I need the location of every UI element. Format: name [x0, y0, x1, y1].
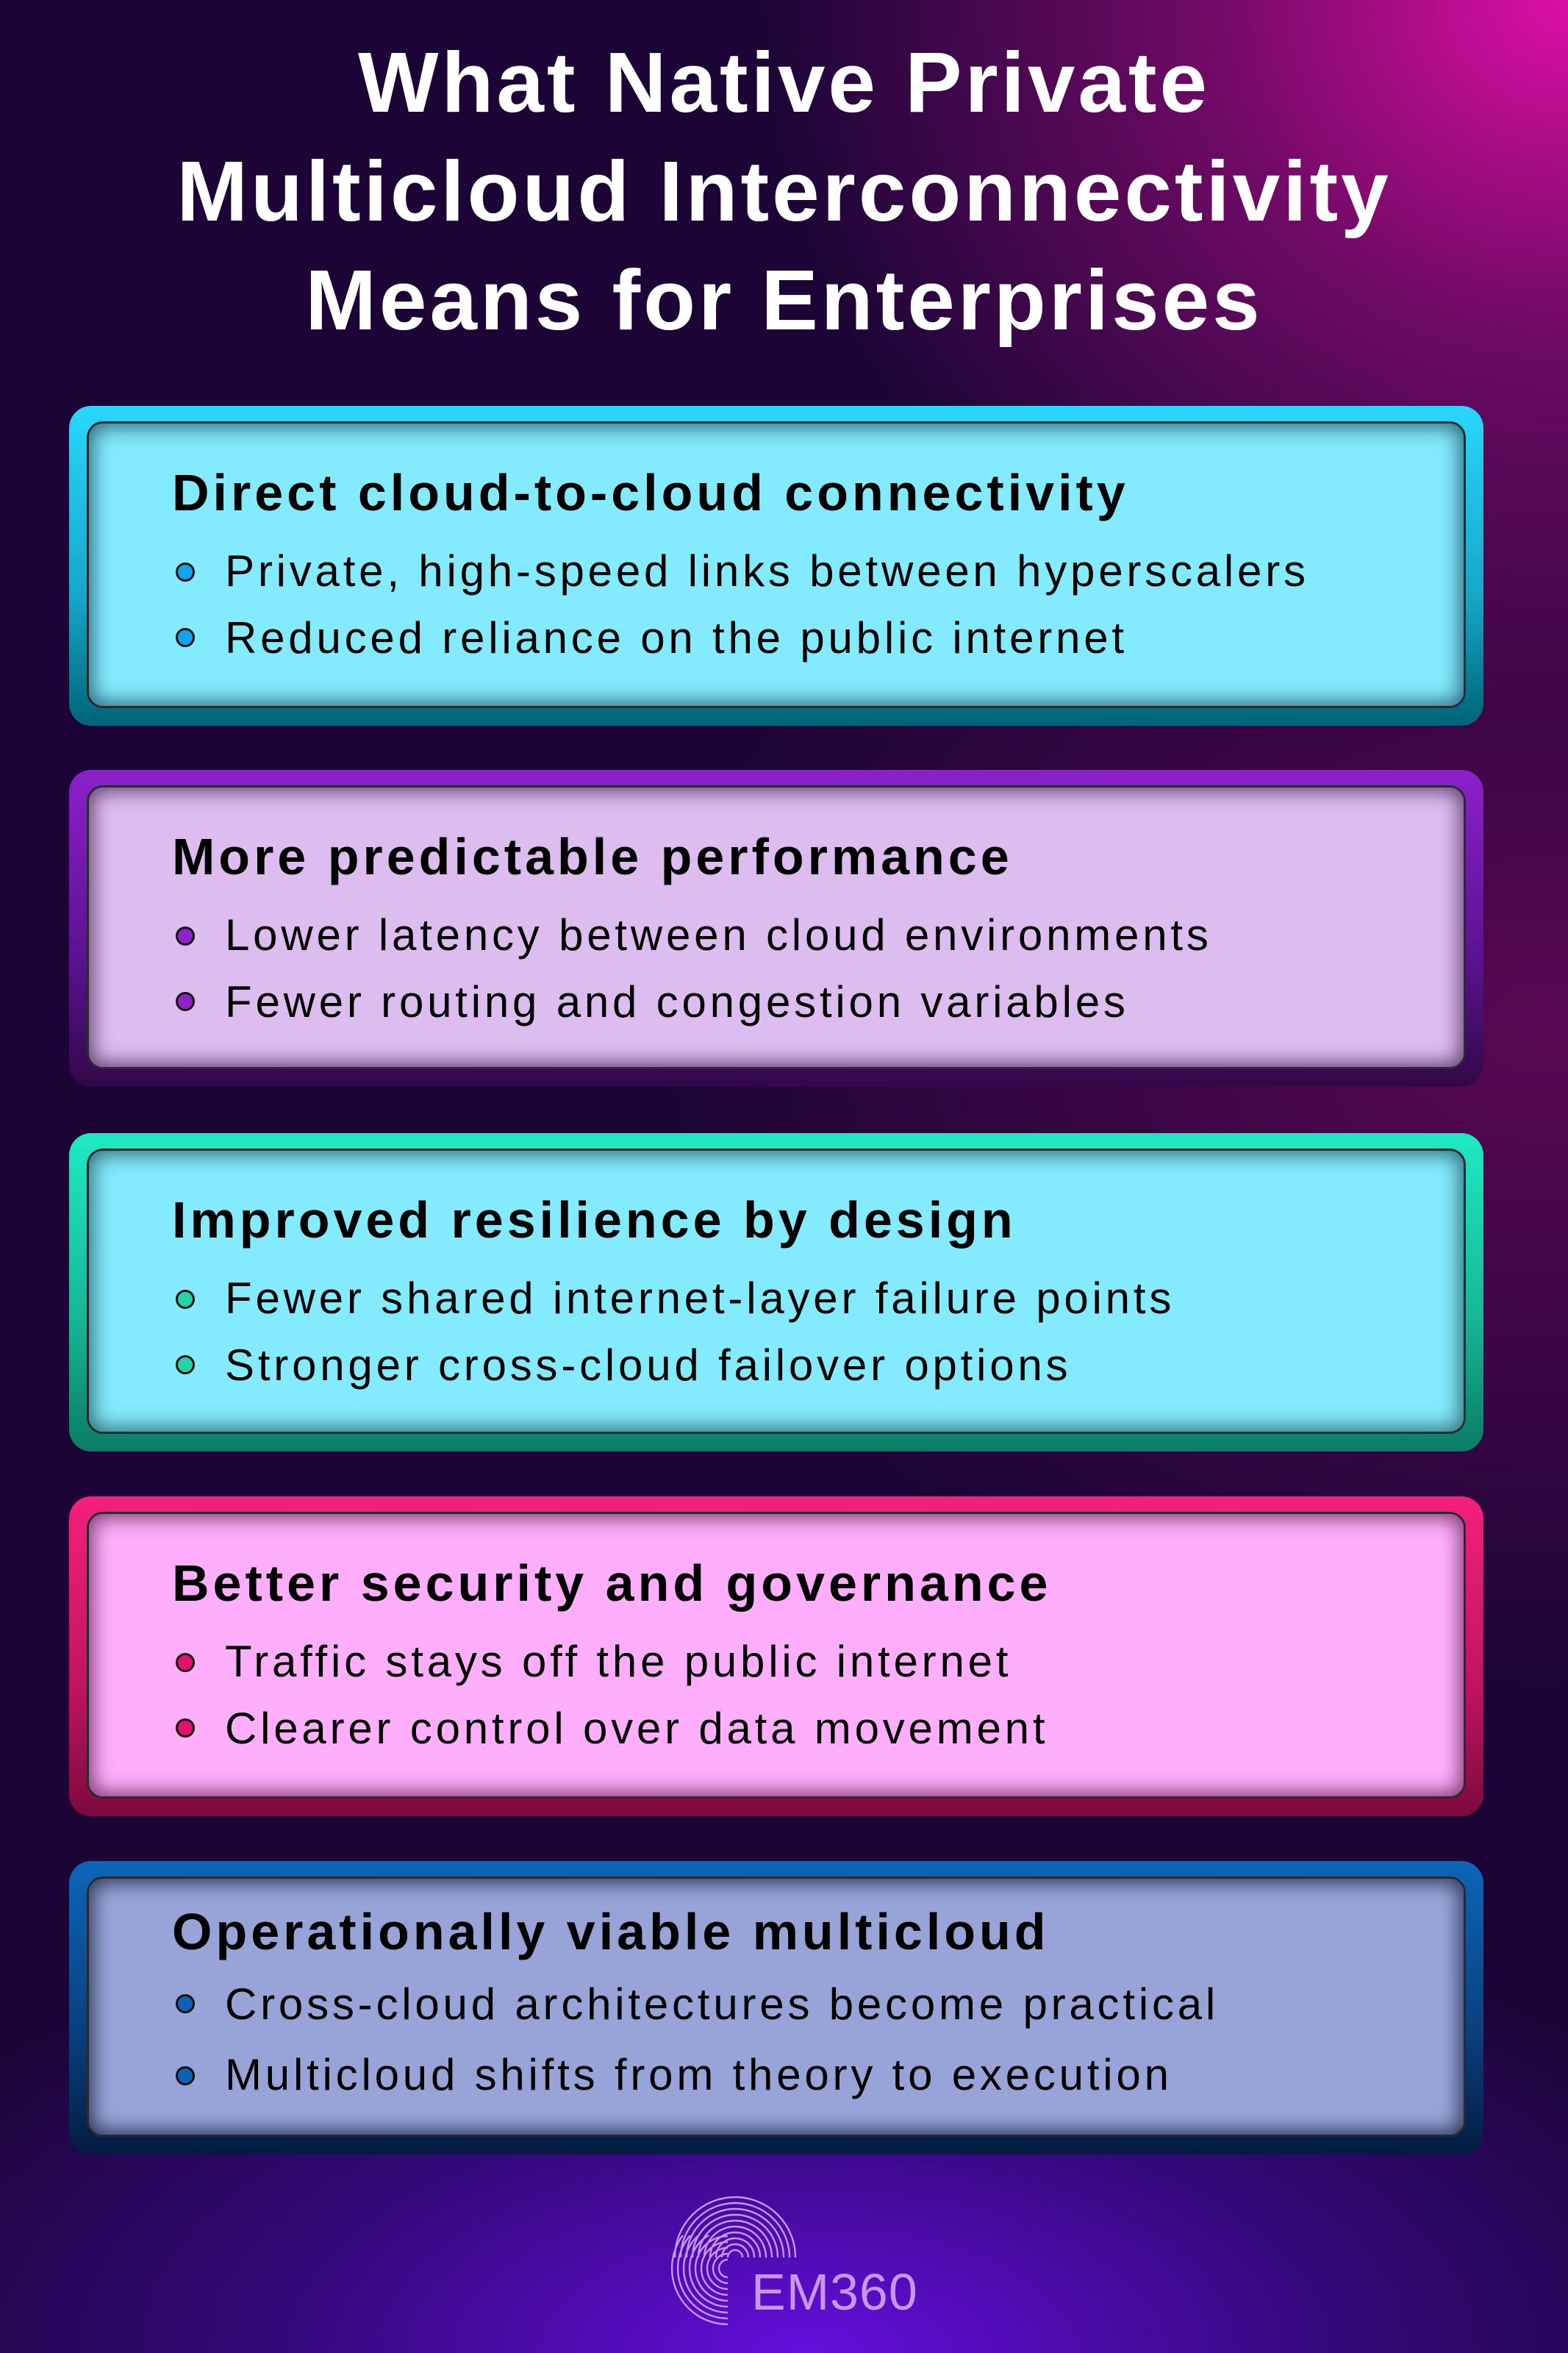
heading: More predictable performance	[172, 828, 1013, 885]
bullet dot	[176, 1290, 195, 1309]
bullet dot	[176, 992, 195, 1011]
heading: Improved resilience by design	[172, 1191, 1017, 1249]
bullet text: Fewer routing and congestion variables	[225, 977, 1129, 1026]
panel: better security and governance	[69, 1496, 1483, 1816]
bullet text: Multicloud shifts from theory to execution	[225, 2050, 1173, 2099]
bullet dot	[176, 2066, 195, 2085]
panel: improved resilience by design	[69, 1133, 1483, 1452]
bullet dot	[176, 1994, 195, 2013]
bullet text: Clearer control over data movement	[225, 1704, 1048, 1753]
bullet text: Fewer shared internet-layer failure points	[225, 1274, 1175, 1323]
bullet dot	[176, 1355, 195, 1374]
bullet text: Lower latency between cloud environments	[225, 910, 1212, 960]
title: Multicloud Interconnectivity	[176, 143, 1392, 239]
heading: Operationally viable multicloud	[172, 1903, 1050, 1960]
bullet dot	[176, 1653, 195, 1672]
logo: EM360	[670, 2196, 918, 2325]
panel: operationally viable multicloud	[69, 1861, 1483, 2154]
bullet text: Traffic stays off the public internet	[225, 1637, 1012, 1686]
bullet text: Cross-cloud architectures become practical	[225, 1979, 1219, 2029]
bullet text: Private, high-speed links between hyperscalers	[225, 546, 1309, 596]
bullet dot	[176, 926, 195, 946]
title: Means for Enterprises	[305, 252, 1263, 348]
panel: direct cloud-to-cloud connectivity	[69, 406, 1483, 726]
bullet text: Stronger cross-cloud failover options	[225, 1340, 1071, 1390]
bullet dot	[176, 628, 195, 647]
title	[176, 35, 1392, 348]
panel: more predictable performance	[69, 770, 1483, 1087]
title: What Native Private	[358, 35, 1210, 130]
bullet dot	[176, 563, 195, 582]
heading: Better security and governance	[172, 1554, 1051, 1612]
icon: cloud arcs	[670, 2196, 797, 2325]
logo text: EM360	[751, 2263, 918, 2321]
bullet text: Reduced reliance on the public internet	[225, 613, 1128, 663]
bullet dot	[176, 1718, 195, 1738]
heading: Direct cloud-to-cloud connectivity	[172, 464, 1129, 521]
